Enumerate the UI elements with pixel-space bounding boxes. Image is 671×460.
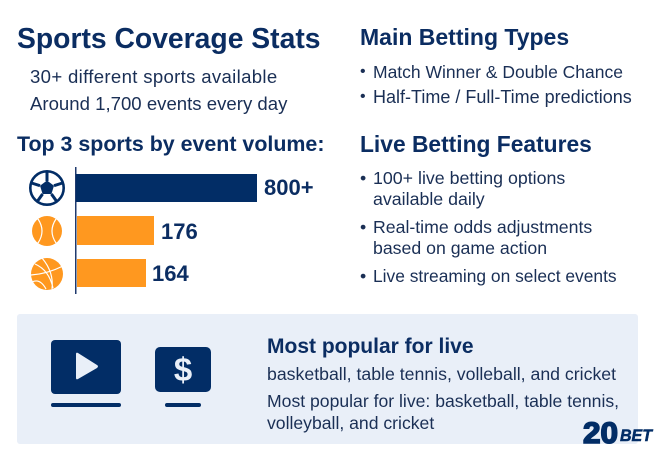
text: description: Most popular for live: basketball, table tennis, xyxy=(267,391,619,411)
icon: tennis ball xyxy=(32,216,62,246)
value: 176: 176 xyxy=(161,219,198,244)
value: 164: 164 xyxy=(152,261,189,286)
list: live features: based on game action xyxy=(373,238,547,258)
list: betting types: Match Winner & Double Chance xyxy=(373,62,623,82)
list: live features: Real-time odds adjustments xyxy=(373,217,592,237)
axis line xyxy=(75,167,76,294)
list: live features: • xyxy=(360,168,366,188)
list: live features: • xyxy=(360,266,366,286)
list: betting types xyxy=(360,62,632,107)
list: live features: available daily xyxy=(373,189,485,209)
bar: 176 xyxy=(77,216,154,245)
coverage stats text: Around 1,700 events every day xyxy=(30,93,287,114)
list: live features: Live streaming on select events xyxy=(373,266,617,286)
bar: 164 xyxy=(77,259,146,287)
value: 800+: 800+ xyxy=(264,175,314,200)
bar: 800+ xyxy=(76,174,257,202)
list: live features: • xyxy=(360,217,366,237)
list: live features xyxy=(360,168,617,286)
coverage stats text xyxy=(30,66,288,114)
heading: top 3 sports: Top 3 sports by event volume: xyxy=(17,132,324,156)
list: betting types: • xyxy=(360,63,366,80)
text: description xyxy=(267,391,619,433)
icon: dollar screen xyxy=(155,347,211,407)
icon: soccer ball xyxy=(30,171,64,205)
list: betting types: • xyxy=(360,88,366,105)
heading: main betting types: Main Betting Types xyxy=(360,24,569,50)
coverage stats text: 30+ different sports available xyxy=(30,66,278,87)
text: description: volleyball, and cricket xyxy=(267,413,434,433)
heading: live betting features: Live Betting Features xyxy=(360,131,592,157)
title: Sports Coverage Stats xyxy=(17,22,321,54)
icon: basketball xyxy=(31,258,63,290)
list: betting types: Half-Time / Full-Time predictions xyxy=(373,87,632,107)
panel: most popular for live xyxy=(17,314,638,444)
logo: 20BET: BET xyxy=(620,426,654,445)
text: sports list: basketball, table tennis, volleball, and cricket xyxy=(267,364,616,384)
logo: 20BET xyxy=(583,418,654,446)
bar chart xyxy=(29,167,314,294)
icon: video play xyxy=(51,340,121,407)
icon: dollar screen: $ xyxy=(174,351,192,388)
heading: Most popular for live xyxy=(267,335,474,358)
list: live features: 100+ live betting options xyxy=(373,168,565,188)
